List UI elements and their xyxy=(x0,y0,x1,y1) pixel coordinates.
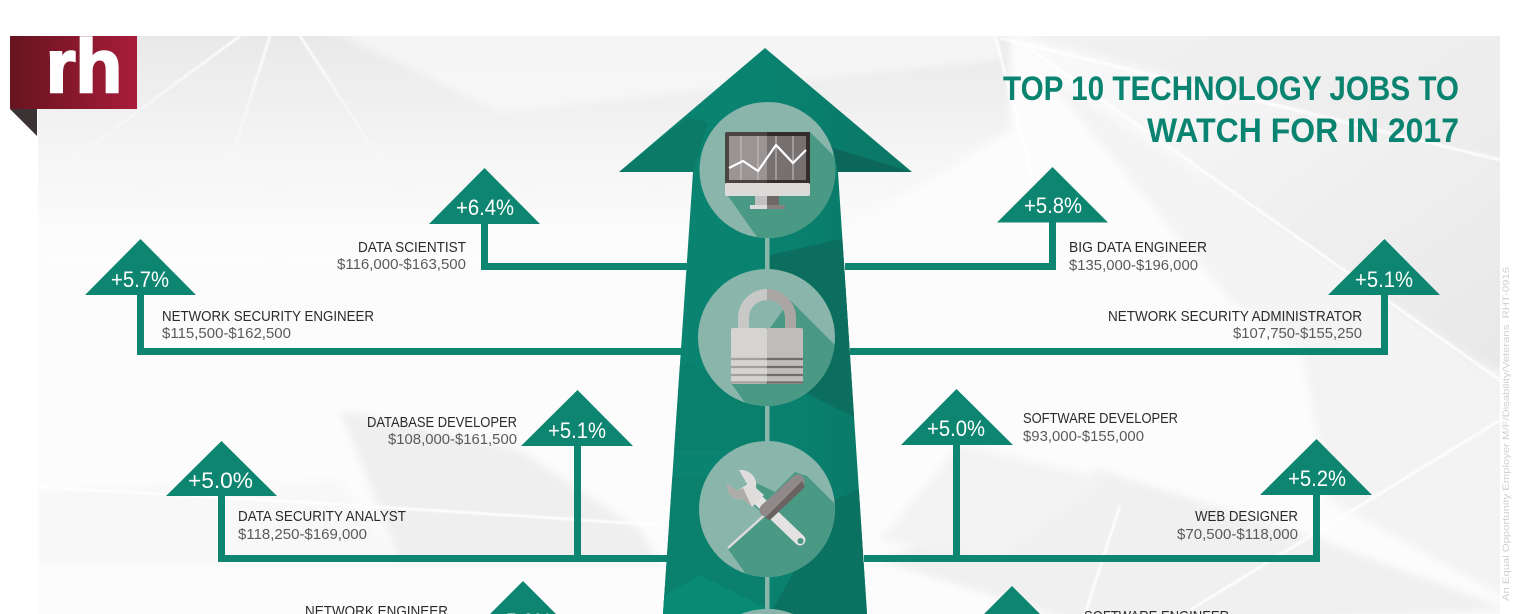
branch: data security analyst and database developer: $118,250-$169,000 xyxy=(238,527,367,543)
title: TOP 10 TECHNOLOGY JOBS TO xyxy=(1003,70,1459,108)
branch: software developer and web designer xyxy=(864,389,1372,558)
branch: data scientist: +6.4% xyxy=(456,195,514,220)
branch: data security analyst and database developer: $108,000-$161,500 xyxy=(388,432,517,448)
branch: data security analyst and database developer: +5.1% xyxy=(548,418,606,443)
branch: data security analyst and database developer: DATABASE DEVELOPER xyxy=(367,414,517,431)
branch: software developer and web designer: WEB DESIGNER xyxy=(1195,508,1298,525)
branch: software developer and web designer: $70,500-$118,000 xyxy=(1177,527,1298,543)
branch: network security administrator xyxy=(850,239,1440,352)
branch: network security engineer xyxy=(85,239,681,352)
title: WATCH FOR IN 2017 xyxy=(1147,112,1459,150)
branch: software developer and web designer: +5.0% xyxy=(927,416,985,441)
branch: big data engineer: $135,000-$196,000 xyxy=(1069,258,1198,274)
branch: software developer and web designer: SOFTWARE DEVELOPER xyxy=(1023,410,1178,427)
branch: network security administrator: NETWORK SECURITY ADMINISTRATOR xyxy=(1108,308,1362,325)
logo: rh xyxy=(10,24,137,136)
branch: network engineer (cropped) xyxy=(305,581,556,614)
branch: data security analyst and database developer: +5.0% xyxy=(188,468,253,493)
logo: rh: rh xyxy=(46,24,122,108)
branch: big data engineer: BIG DATA ENGINEER xyxy=(1069,239,1207,256)
branch: data scientist: DATA SCIENTIST xyxy=(358,239,466,256)
branch: network security engineer: NETWORK SECURITY ENGINEER xyxy=(162,308,374,325)
branch: network security administrator: +5.1% xyxy=(1355,267,1413,292)
icon: monitor with chart xyxy=(700,102,836,238)
icon: padlock xyxy=(698,269,835,406)
branch: big data engineer: +5.8% xyxy=(1024,193,1082,218)
branch: network security administrator: $107,750-$155,250 xyxy=(1233,326,1362,342)
branch: data security analyst and database developer: DATA SECURITY ANALYST xyxy=(238,508,406,525)
icon circle: cropped fourth xyxy=(741,609,793,614)
icon: crossed wrench and screwdriver xyxy=(699,441,835,577)
branch: network security engineer: +5.7% xyxy=(111,267,169,292)
title xyxy=(1003,70,1459,150)
branch: software developer and web designer: +5.2% xyxy=(1288,466,1346,491)
branch: data scientist: $116,000-$163,500 xyxy=(337,257,466,273)
branch: data scientist xyxy=(337,168,688,273)
legal note: An Equal Opportunity Employer M/F/Disability/Veterans RHT-0916 xyxy=(1501,267,1512,601)
branch: data security analyst and database developer xyxy=(166,390,667,558)
central arrow xyxy=(619,48,912,614)
branch: software engineer (cropped) xyxy=(984,586,1229,614)
branch: software developer and web designer: $93,000-$155,000 xyxy=(1023,429,1144,445)
branch: big data engineer xyxy=(845,167,1207,274)
branch: network security engineer: $115,500-$162,500 xyxy=(162,326,291,342)
